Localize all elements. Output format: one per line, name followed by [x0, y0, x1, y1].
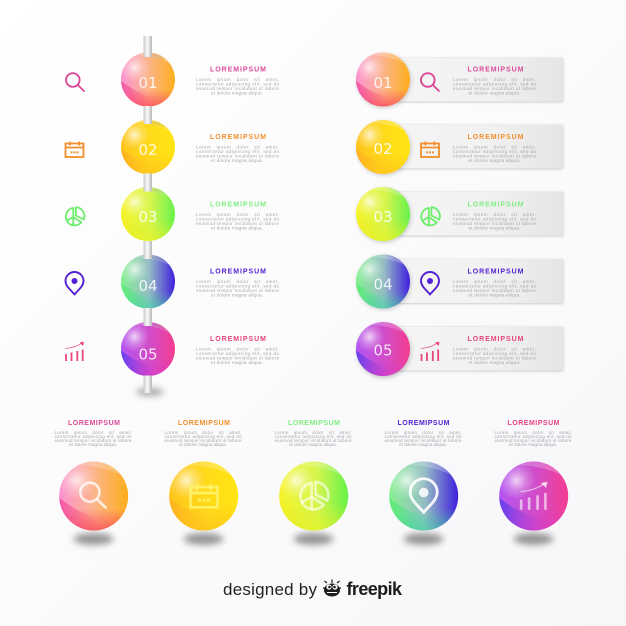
text: item 2: Lorem ipsum dolor sit amet, — [196, 144, 279, 150]
text: item 2 — [196, 134, 279, 163]
banner 2: consectetur adipiscing elit, sed do — [453, 149, 536, 154]
bottom item 1: et dolore magna aliqua. — [69, 442, 117, 447]
banner 5: Lorem ipsum dolor sit amet, — [453, 346, 536, 352]
text: item 4: eiusmod tempor incididunt ut labore — [196, 288, 279, 293]
text: item 4 — [196, 268, 279, 298]
bottom item 3: consectetur adipiscing elit, sed do — [274, 434, 352, 439]
banner 4: eiusmod tempor incididunt ut labore — [453, 288, 536, 293]
sphere 03: 03 — [138, 208, 158, 226]
bottom item 4: eiusmod tempor incididunt ut labore — [384, 438, 462, 443]
bottom item 2: eiusmod tempor incididunt ut labore — [164, 438, 242, 443]
bottom item 5: LOREMIPSUM — [508, 420, 560, 427]
banner 3: eiusmod tempor incididunt ut labore — [453, 221, 536, 226]
banner 4: consectetur adipiscing elit, sed do — [453, 284, 536, 288]
banner 1: 01 — [373, 74, 393, 92]
text: item 3: consectetur adipiscing elit, sed do — [196, 216, 279, 222]
banner 3 — [355, 187, 563, 242]
banner 5 — [355, 322, 563, 378]
text: item 2: et dolore magna aliqua. — [211, 158, 263, 163]
icon: calendar — [66, 142, 84, 157]
banner 2: Lorem ipsum dolor sit amet, — [453, 144, 536, 150]
bottom item 4: et dolore magna aliqua. — [399, 442, 447, 447]
banner 3: LOREMIPSUM — [468, 202, 524, 208]
text: item 2: LOREMIPSUM — [210, 134, 266, 141]
banner 5: eiusmod tempor incididunt ut labore — [453, 356, 536, 360]
text: item 4: et dolore magna aliqua. — [211, 292, 263, 298]
rod shadows on spheres — [152, 53, 166, 330]
rod segments — [144, 36, 152, 393]
banner 2: eiusmod tempor incididunt ut labore — [453, 154, 536, 158]
bottom item 3 — [274, 420, 352, 545]
banner 4: 04 — [373, 276, 393, 294]
sphere 01 — [120, 52, 175, 106]
sphere 01: 01 — [138, 74, 158, 92]
banner 1: consectetur adipiscing elit, sed do — [453, 82, 536, 86]
bottom item 5: Lorem ipsum dolor sit amet, — [494, 430, 572, 435]
text: item 3: Lorem ipsum dolor sit amet, — [196, 212, 279, 217]
text: item 1: et dolore magna aliqua. — [211, 90, 263, 96]
banner 3: Lorem ipsum dolor sit amet, — [453, 212, 536, 217]
bottom item 2: consectetur adipiscing elit, sed do — [164, 434, 242, 439]
bottom item 4: consectetur adipiscing elit, sed do — [384, 434, 462, 439]
icon: pie chart — [66, 207, 84, 226]
banner 3: 03 — [373, 208, 393, 226]
banner 4: LOREMIPSUM — [468, 268, 524, 276]
text: item 3 — [196, 202, 279, 230]
text: item 3: eiusmod tempor incididunt ut labore — [196, 221, 279, 226]
sphere 05 — [120, 322, 175, 376]
bottom row of spheres — [54, 420, 572, 545]
text: item 1: LOREMIPSUM — [210, 66, 266, 74]
icon: magnifier — [66, 73, 84, 91]
bottom item 3: eiusmod tempor incididunt ut labore — [274, 438, 352, 443]
banner 2: LOREMIPSUM — [468, 134, 524, 141]
right banner column — [355, 52, 563, 378]
bottom item 4 — [384, 420, 462, 545]
banner 1: LOREMIPSUM — [468, 66, 524, 74]
text: item 2: consectetur adipiscing elit, sed do — [196, 149, 279, 154]
text: item 4: consectetur adipiscing elit, sed do — [196, 284, 279, 288]
sphere 04 — [120, 254, 175, 308]
banner 1: Lorem ipsum dolor sit amet, — [453, 77, 536, 82]
bottom item 2 — [164, 420, 242, 545]
bottom item 2: LOREMIPSUM — [178, 420, 230, 427]
bottom item 1: LOREMIPSUM — [68, 420, 120, 427]
banner 1 — [355, 52, 563, 108]
icon: growth chart — [66, 342, 84, 361]
bottom item 1 — [54, 420, 132, 545]
text: item 5 — [196, 336, 279, 365]
text: item 5: Lorem ipsum dolor sit amet, — [196, 346, 279, 352]
sphere 05: 05 — [138, 346, 158, 364]
banner 3: consectetur adipiscing elit, sed do — [453, 216, 536, 222]
banner 4: et dolore magna aliqua. — [468, 292, 520, 298]
text: item 1: eiusmod tempor incididunt ut labore — [196, 86, 279, 91]
bottom item 5: et dolore magna aliqua. — [509, 442, 557, 447]
bottom item 3: et dolore magna aliqua. — [289, 442, 337, 447]
sphere 03 — [120, 187, 175, 241]
left timeline column — [66, 36, 279, 396]
bottom item 2: et dolore magna aliqua. — [179, 442, 227, 447]
banner 5: LOREMIPSUM — [468, 336, 524, 343]
text: item 2: eiusmod tempor incididunt ut labore — [196, 154, 279, 158]
rod base shadow — [136, 388, 164, 396]
bottom item 1: Lorem ipsum dolor sit amet, — [54, 430, 132, 435]
text: item 1 — [196, 66, 279, 96]
banner 2: 02 — [373, 140, 393, 158]
text: item 1: Lorem ipsum dolor sit amet, — [196, 77, 279, 82]
sphere 04: 04 — [138, 277, 158, 295]
bottom item 4: LOREMIPSUM — [398, 420, 450, 427]
banner 2 — [355, 120, 563, 176]
icon: freepik bee — [323, 580, 341, 596]
text: item 3: LOREMIPSUM — [210, 202, 266, 208]
bottom item 3: LOREMIPSUM — [288, 420, 340, 427]
bottom item 5: eiusmod tempor incididunt ut labore — [494, 438, 572, 443]
bottom item 5: consectetur adipiscing elit, sed do — [494, 434, 572, 439]
icon: location pin — [66, 272, 84, 294]
banner 2: et dolore magna aliqua. — [468, 158, 520, 163]
banner 1: eiusmod tempor incididunt ut labore — [453, 86, 536, 91]
sphere 02 — [120, 120, 175, 174]
text: item 4: LOREMIPSUM — [210, 268, 266, 276]
bottom item 4: Lorem ipsum dolor sit amet, — [384, 430, 462, 435]
banner 5: consectetur adipiscing elit, sed do — [453, 351, 536, 356]
bottom item 5 — [494, 420, 572, 545]
banner 4 — [355, 254, 563, 310]
credit: designed by freepik — [223, 579, 403, 599]
text: item 5: eiusmod tempor incididunt ut labore — [196, 356, 279, 360]
banner 1: et dolore magna aliqua. — [468, 90, 520, 96]
sphere 02: 02 — [138, 141, 158, 159]
text: item 5: et dolore magna aliqua. — [211, 360, 263, 365]
bottom item 3: Lorem ipsum dolor sit amet, — [274, 430, 352, 435]
text: item 5: LOREMIPSUM — [210, 336, 266, 343]
banner 3: et dolore magna aliqua. — [468, 226, 520, 230]
text: item 3: et dolore magna aliqua. — [211, 226, 263, 230]
credit: designed by freepik: designed by — [223, 580, 318, 599]
banner 5: 05 — [373, 342, 393, 360]
bottom item 1: eiusmod tempor incididunt ut labore — [54, 438, 132, 443]
bottom item 2: Lorem ipsum dolor sit amet, — [164, 430, 242, 435]
text: item 1: consectetur adipiscing elit, sed do — [196, 82, 279, 86]
banner 5: et dolore magna aliqua. — [468, 360, 520, 365]
text: item 5: consectetur adipiscing elit, sed do — [196, 351, 279, 356]
text: item 4: Lorem ipsum dolor sit amet, — [196, 279, 279, 284]
bottom item 1: consectetur adipiscing elit, sed do — [54, 434, 132, 439]
banner 4: Lorem ipsum dolor sit amet, — [453, 279, 536, 284]
credit: designed by freepik: freepik — [346, 579, 403, 599]
